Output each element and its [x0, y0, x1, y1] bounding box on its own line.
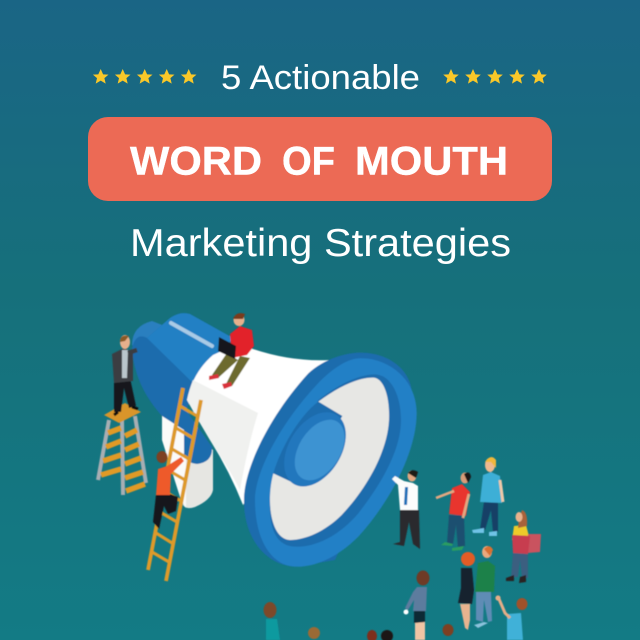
stepladder [98, 403, 146, 495]
crowd heads at bottom edge [264, 602, 454, 640]
person: woman in black dress [458, 552, 475, 630]
title: word of mouth: MOUTH [355, 140, 508, 184]
person: man in red t-shirt [436, 472, 471, 551]
laptop [218, 337, 236, 359]
megaphone rim [244, 353, 417, 567]
person: climber on ladder [148, 388, 201, 581]
person: man in light blue t-shirt [495, 595, 528, 640]
person: girl with backpack [506, 510, 541, 583]
megaphone back body [132, 313, 233, 464]
stars left [93, 69, 196, 84]
heading: 5 Actionable: 5 Actionable [221, 59, 420, 97]
handle [162, 412, 213, 508]
subheading: marketing strategies: Marketing Strategies [130, 222, 511, 265]
person: man on stepladder [98, 335, 146, 495]
person: businessman [392, 470, 420, 549]
person: man in blue t-shirt [472, 457, 503, 536]
title: word of mouth: WORD [130, 140, 262, 184]
ladder [148, 388, 201, 581]
person: woman in grey top [404, 570, 430, 640]
person: man in green t-shirt [474, 546, 495, 628]
title: word of mouth: OF [282, 140, 335, 184]
driver cylinder [271, 401, 359, 498]
title: word of mouth [130, 140, 508, 184]
illustration [98, 313, 541, 640]
megaphone cone [187, 348, 330, 505]
title banner [88, 117, 552, 201]
stars right [443, 69, 547, 84]
person: man sitting with laptop [209, 313, 254, 389]
backpack [528, 534, 541, 553]
inner bell [270, 378, 389, 540]
megaphone [132, 313, 417, 567]
